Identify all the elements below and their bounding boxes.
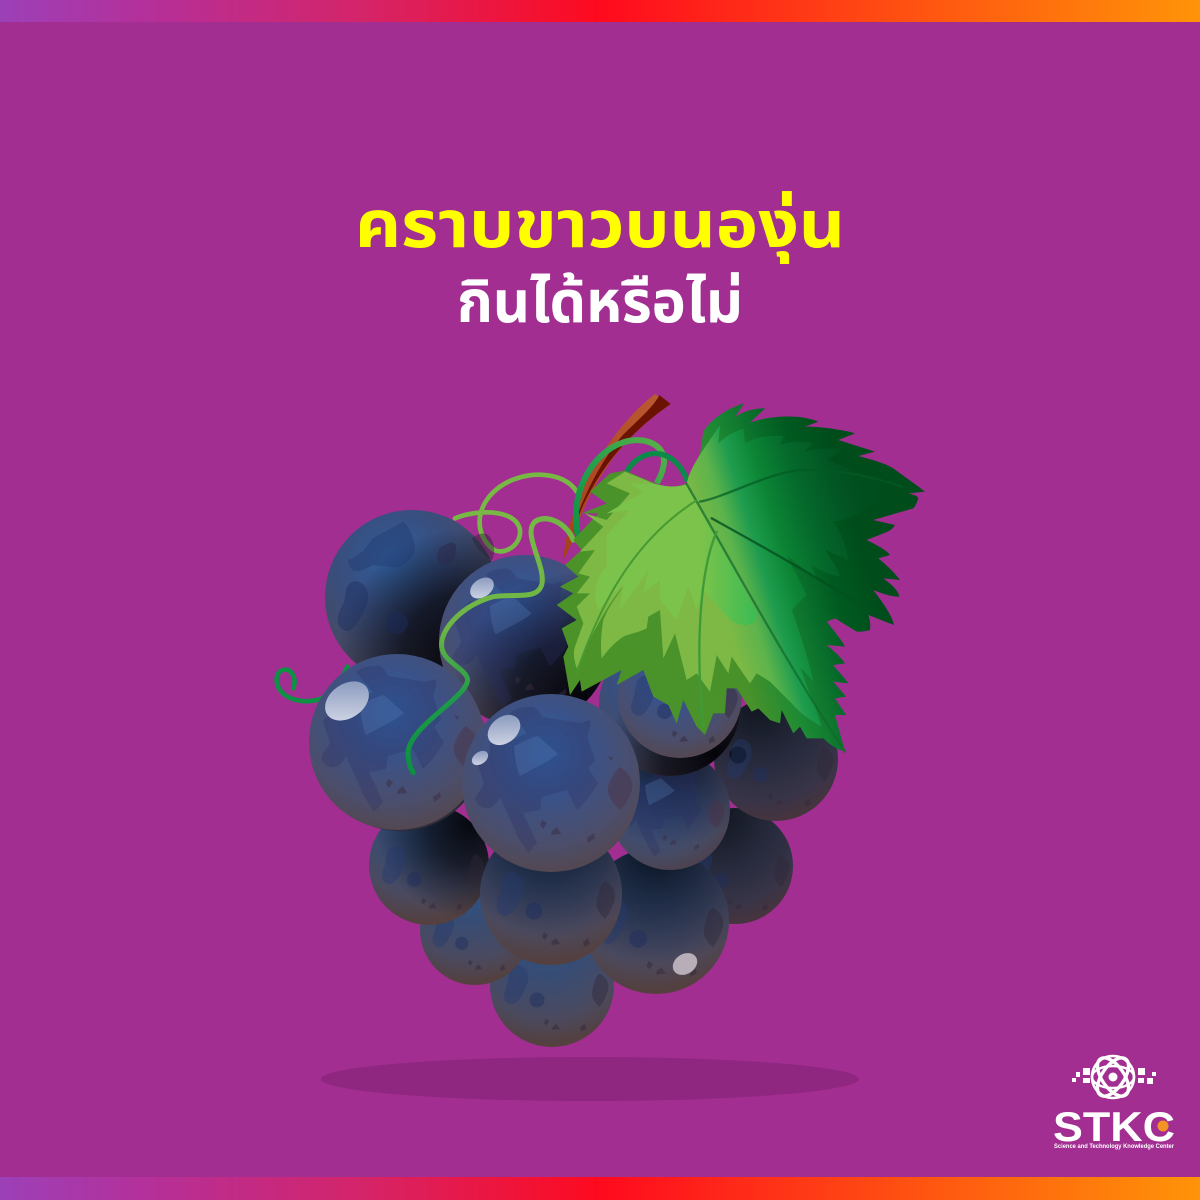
grape: under the leaf [599, 634, 742, 776]
logo orange dot [1158, 1120, 1168, 1132]
logo tagline: Science and Technology Knowledge Center [1054, 1144, 1175, 1150]
logo wordmark: STKC [1053, 1103, 1175, 1150]
grape: far right upper [714, 697, 838, 821]
grape: top centre [439, 555, 611, 727]
highlight: front centre grape small [469, 748, 491, 768]
leaf lighter lobes [574, 425, 877, 727]
grape: front centre [462, 694, 640, 872]
top gradient band [0, 0, 1200, 22]
grape: lower left small [420, 875, 530, 985]
front tendril across grapes [408, 522, 542, 773]
logo pixel squares [1072, 1068, 1156, 1084]
grape: right centre [610, 750, 730, 870]
highlight: front centre grape large [482, 709, 526, 751]
back tendrils [277, 475, 577, 701]
logo: STKC [1053, 1053, 1175, 1150]
stem [563, 394, 671, 560]
highlight: lower right grape [669, 949, 701, 979]
highlight: left front grape [318, 673, 376, 729]
grape: top left [325, 510, 499, 684]
bottom gradient band [0, 1177, 1200, 1200]
upper green tendrils by the stem [576, 440, 688, 537]
leaf outline base [557, 403, 925, 752]
highlight: top centre grape [466, 573, 498, 603]
grape: lower left mid [369, 805, 489, 925]
logo atom icon [1091, 1053, 1135, 1101]
illustration: grape bunch [277, 394, 925, 1047]
title: yellow headline: คราบขาวบนองุ่น [355, 187, 845, 264]
grape: far right lower [677, 808, 793, 924]
grape: bottom [490, 923, 614, 1047]
grape: lower centre [480, 823, 622, 965]
leaf [557, 403, 925, 752]
ground shadow [321, 1057, 859, 1101]
grape: left front [309, 654, 486, 831]
subtitle: white question: กินได้หรือไม่ [457, 269, 743, 335]
leaf veins [577, 470, 902, 752]
leaf bright core [595, 483, 757, 625]
grape: lower right large [583, 848, 729, 994]
